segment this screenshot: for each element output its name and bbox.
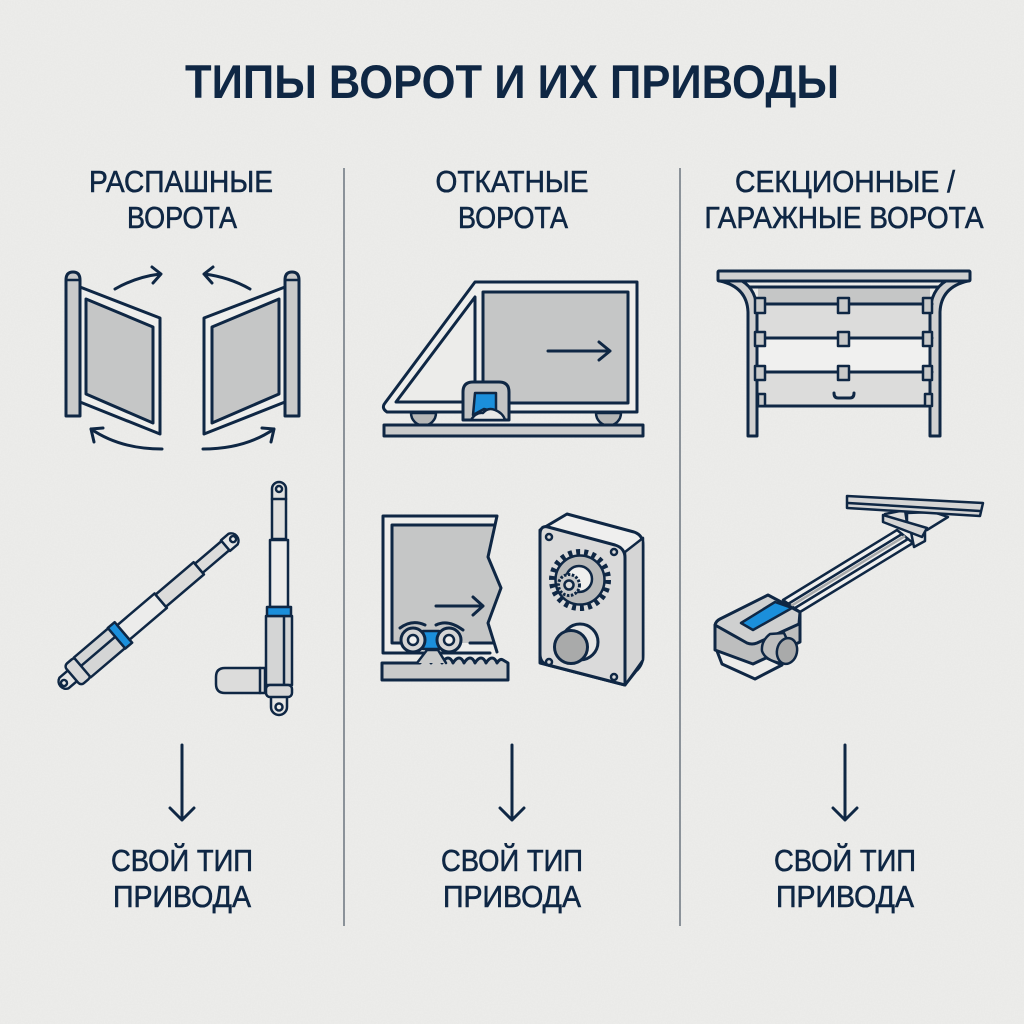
icon: overhead garage opener [715,496,983,679]
arrow: right column [833,745,857,820]
arrow: left column [170,745,194,820]
label: middle column drive [441,842,583,914]
icon: sliding gate [383,282,643,436]
icon: vertical linear actuator [216,482,292,715]
label: left column drive: ПРИВОДА [113,879,251,914]
heading: swing gates: РАСПАШНЫЕ [89,164,273,199]
icon: sectional garage door [718,271,970,436]
arrow: middle column [500,745,524,820]
heading: sliding gates [436,164,588,235]
heading: sectional garage gates: СЕКЦИОННЫЕ / [735,164,955,199]
icon: swing gates [66,267,299,449]
label: right column drive: СВОЙ ТИП [774,842,916,878]
label: right column drive: ПРИВОДА [776,879,914,914]
title: ТИПЫ ВОРОТ И ИХ ПРИВОДЫ [185,55,839,108]
heading: swing gates [89,164,273,235]
heading: swing gates: ВОРОТА [127,200,237,235]
icon: gear motor box [540,514,643,685]
icon: rack and pinion gate [382,516,508,680]
heading: sliding gates: ВОРОТА [458,200,568,235]
label: middle column drive: СВОЙ ТИП [441,842,583,878]
label: left column drive: СВОЙ ТИП [111,842,253,878]
heading: sliding gates: ОТКАТНЫЕ [436,164,588,199]
heading: sectional garage gates [704,164,984,235]
label: middle column drive: ПРИВОДА [443,879,581,914]
label: left column drive [111,842,253,914]
heading: sectional garage gates: ГАРАЖНЫЕ ВОРОТА [704,200,984,235]
label: right column drive [774,842,916,914]
icon: diagonal linear actuator [52,526,245,696]
